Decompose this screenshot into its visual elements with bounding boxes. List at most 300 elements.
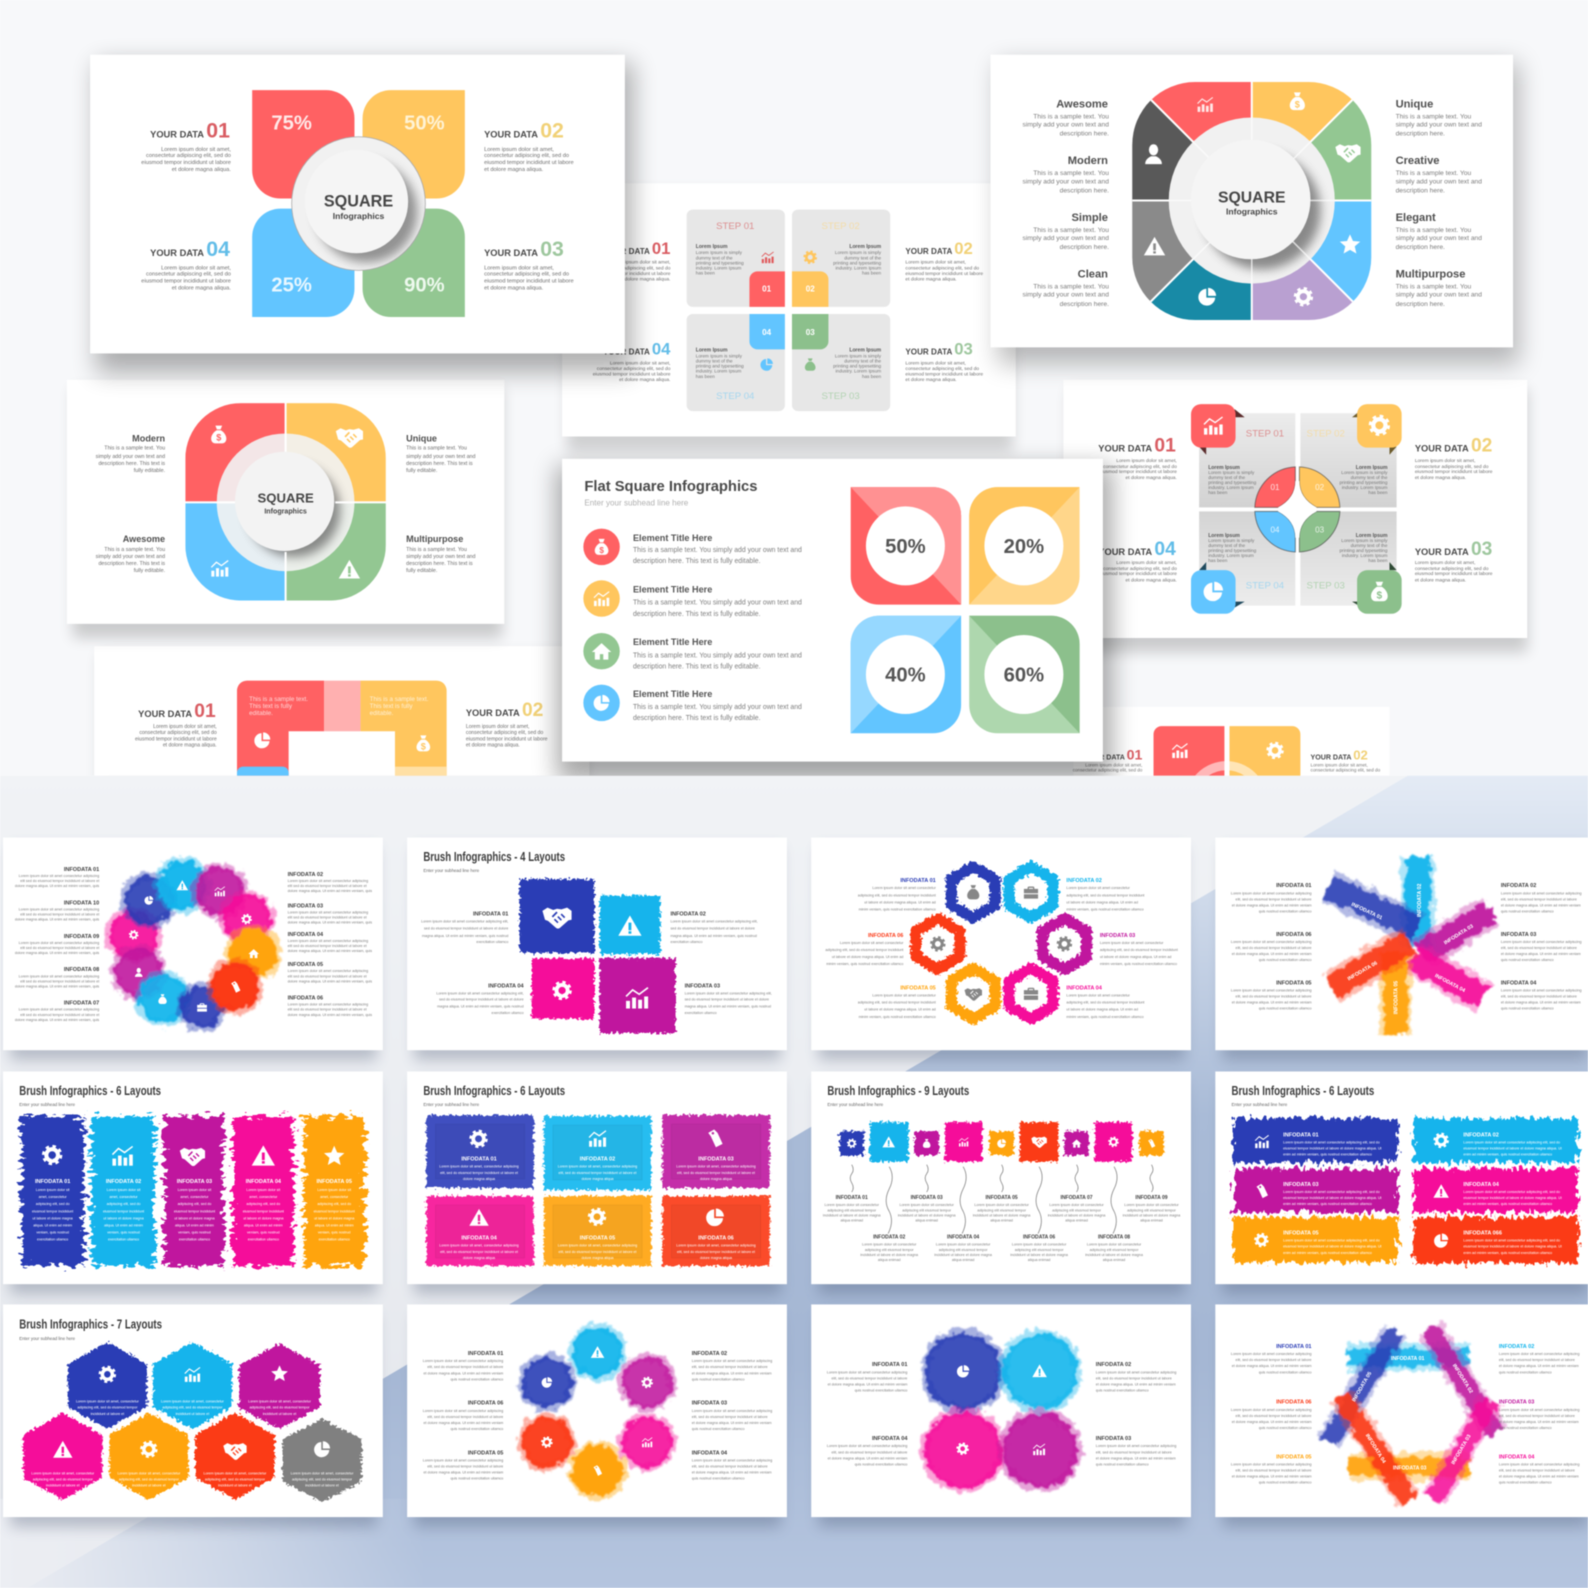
your data 03: YOUR DATA 03 <box>484 237 564 261</box>
column 1 text: aliqua. Ut enim ad minim <box>33 1223 72 1227</box>
stroke labels: INFODATA 05 <box>1351 1371 1373 1403</box>
infodata left labels: elit, sed do eiusmod tempor incididunt ut labore <box>1236 995 1312 999</box>
infodata 03 <box>1096 1436 1176 1466</box>
step numbers: 01 <box>762 285 772 294</box>
your data 02: eiusmod tempor incididunt ut labore <box>484 160 574 166</box>
your data 01: eiusmod tempor incididunt ut labore <box>593 271 671 277</box>
your data 04: Lorem ipsum dolor sit amet, <box>1116 560 1177 566</box>
infodata 01: et dolore magna aliqua. Ut enim ad minim veniam <box>828 1382 907 1386</box>
lower labels: INFODATA 04 <box>947 1235 979 1241</box>
right labels <box>1499 1344 1579 1485</box>
left labels: INFODATA 01 <box>1276 1344 1312 1350</box>
your data 03: consectetur adipiscing elit, sed do <box>905 366 979 372</box>
infodata left labels: Lorem ipsum dolor sit amet consectetur adipiscing <box>1231 940 1312 944</box>
infodata 06: minim veniam, quis nostrud exercitation ullamco <box>826 962 903 966</box>
panel: brush bars slide <box>1215 1071 1588 1294</box>
infodata 03 <box>1100 933 1178 966</box>
lower labels: Lorem ipsum dolor sit consectetur <box>1012 1243 1067 1247</box>
your data 03: eiusmod tempor incididunt ut labore <box>905 372 983 378</box>
infodata 02: et dolore magna aliqua. Ut enim ad minim veniam <box>1096 1382 1176 1386</box>
card texts: elit, sed do eiusmod tempor incididunt ut labore et <box>677 1171 755 1175</box>
infodata 03: minim veniam, quis nostrud exercitation ullamco <box>1100 962 1177 966</box>
left labels: dolore magna aliqua. Ut enim ad minim veniam, quis <box>15 984 99 988</box>
step numbers: 04 <box>762 328 772 337</box>
left labels: et dolore magna aliqua. Ut enim ad minim veniam <box>424 1471 503 1475</box>
step body text: Lorem Ipsum <box>696 347 728 353</box>
your data 04 <box>141 237 231 292</box>
bar texts: enim ad minim veniam, quis nostrud exercitation ullamco <box>1283 1202 1372 1206</box>
infodata right labels: Lorem ipsum dolor sit amet consectetur adipiscing <box>1501 940 1581 944</box>
your data 03: et dolore magna aliqua. <box>905 377 957 383</box>
tile 20%: 20% <box>1004 536 1044 558</box>
upper labels: Lorem ipsum dolor sit consectetur <box>825 1203 880 1207</box>
infodata 04: INFODATA 04 <box>872 1436 908 1442</box>
right labels: Lorem ipsum dolor sit amet consectetur adipiscing <box>1499 1408 1579 1412</box>
your data 01: eiusmod tempor incididunt ut labore <box>135 736 217 742</box>
lower labels <box>860 1235 1144 1262</box>
your data 04: consectetur adipiscing elit, sed do <box>146 271 231 277</box>
left labels: dolore magna aliqua. Ut enim ad minim veniam, quis <box>15 951 99 955</box>
upper labels: INFODATA 05 <box>986 1195 1018 1201</box>
percentages: 25% <box>271 275 312 297</box>
star strokes <box>1329 857 1491 1035</box>
left labels: elit, sed do eiusmod tempor incididunt ut labore <box>427 1365 503 1369</box>
your data labels <box>1073 748 1381 773</box>
infodata 01: quis nostrud exercitation ullamco <box>855 1389 907 1393</box>
modern: This is a sample text. You <box>1033 170 1109 177</box>
card headings: STEP 01 <box>1246 428 1284 439</box>
centre ring <box>217 433 354 571</box>
your data 04 <box>1098 539 1177 583</box>
column 4 text: exercitation ullamco <box>248 1238 279 1242</box>
card body text: Lorem Ipsum is simply <box>1208 538 1255 543</box>
step body text: dummy text of the <box>844 359 882 364</box>
subtitle: Enter your subhead line here <box>423 868 480 873</box>
card texts: Lorem ipsum dolor sit amet, consectetur adipiscing <box>676 1244 756 1248</box>
infodata 05: adipiscing elit, sed do eiusmod tempor incididunt <box>858 1001 936 1005</box>
infodata left labels: Lorem ipsum dolor sit amet consectetur adipiscing <box>1231 891 1312 895</box>
left labels: Lorem ipsum dolor sit amet consectetur adipiscing <box>19 907 99 911</box>
left labels: quis nostrud exercitation ullamco <box>451 1427 503 1431</box>
your data 01: consectetur adipiscing elit, sed do <box>139 730 217 736</box>
card body text: industry. Lorem Ipsum <box>1208 485 1254 490</box>
left labels: INFODATA 01 <box>468 1351 503 1357</box>
card texts <box>439 1157 756 1260</box>
infodata right labels: Lorem ipsum dolor sit amet consectetur adipiscing <box>1501 988 1581 992</box>
blobs <box>925 1333 1078 1489</box>
upper labels: INFODATA 07 <box>1060 1195 1093 1201</box>
upper labels: incididunt ut labore et dolore magna <box>898 1213 956 1217</box>
step body text: Lorem Ipsum <box>849 244 882 250</box>
card body text: has been <box>1368 490 1388 495</box>
your data 04: YOUR DATA 04 <box>603 339 671 358</box>
left labels: Lorem ipsum dolor sit amet consectetur adipiscing <box>423 1409 503 1413</box>
left labels: et dolore magna aliqua. Ut enim ad minim veniam <box>424 1371 503 1375</box>
centre circle <box>292 137 425 270</box>
bar texts: Lorem ipsum dolor sit amet consectetur adipiscing elit, sed do <box>1463 1190 1560 1194</box>
step body text: industry. Lorem Ipsum <box>696 369 741 374</box>
your data labels: YOUR DATA 02 <box>1311 748 1368 763</box>
infodata 04: quis nostrud exercitation ullamco <box>855 1462 907 1466</box>
column 3 text: ut labore et dolore magna <box>174 1216 215 1220</box>
infodata 01: magna aliqua. Ut enim ad minim veniam, quis nostrud <box>422 934 508 938</box>
left labels: Lorem ipsum dolor sit amet consectetur adipiscing <box>19 874 99 878</box>
title: Brush Infographics - 6 Layouts <box>19 1083 161 1098</box>
unique: simply add your own text and <box>1396 122 1482 129</box>
square bracket shape: editable. <box>249 710 273 717</box>
infodata 01: exercitation ullamco <box>476 940 508 944</box>
your data 04: et dolore magna aliqua. <box>1126 577 1177 583</box>
left labels: Lorem ipsum dolor sit amet consectetur adipiscing <box>423 1458 503 1462</box>
your data 02: et dolore magna aliqua. <box>1415 475 1466 481</box>
leaf numbers: 03 <box>1315 526 1325 535</box>
column 4 text: adipiscing elit, sed do <box>246 1202 280 1206</box>
infodata 02 <box>670 912 758 944</box>
modern <box>96 434 165 474</box>
panel: brush hexagons slide <box>3 1304 383 1527</box>
bar texts: Lorem ipsum dolor sit amet consectetur adipiscing elit, sed do <box>1283 1190 1380 1194</box>
your data 02 <box>1415 436 1493 481</box>
your data 01: YOUR DATA 01 <box>150 119 230 143</box>
column 2 text: eiusmod tempor incididunt <box>103 1209 144 1213</box>
right labels <box>692 1351 772 1481</box>
left labels: elit, sed do eiusmod tempor incididunt ut labore <box>1236 1358 1312 1362</box>
right labels: dolore magna aliqua. Ut enim ad minim veniam, quis <box>288 949 372 953</box>
lower labels: incididunt ut labore et dolore magna <box>860 1253 919 1257</box>
right labels: elit, sed do eiusmod tempor incididunt ut labore <box>692 1464 768 1468</box>
hexagon texts: incididunt ut labore et <box>176 1412 209 1416</box>
bar texts: eiusmod tempor incididunt ut labore et dolore magna aliqua. Ut <box>1463 1245 1562 1249</box>
unique: simply add your own text and <box>406 454 476 460</box>
stroke labels: INFODATA 05 <box>1394 981 1400 1014</box>
simple: This is a sample text. You <box>1033 227 1109 234</box>
right labels: INFODATA 04 <box>692 1450 728 1456</box>
element 1: Element Title Here <box>633 533 712 543</box>
your data 03: consectetur adipiscing elit, sed do <box>1415 566 1489 572</box>
infodata 03: adipiscing elit, sed do eiusmod tempor incididunt <box>1100 948 1178 952</box>
brush tiles <box>840 1122 1164 1162</box>
hexagon texts <box>31 1400 354 1488</box>
step headings: STEP 02 <box>821 221 860 232</box>
infodata left labels: INFODATA 01 <box>1276 883 1312 889</box>
hexagon texts: incididunt ut labore et <box>91 1412 124 1416</box>
stroke labels: INFODATA 04 <box>1364 1433 1387 1465</box>
centre ring: SQUARE <box>257 490 314 505</box>
upper labels: aliqua enimad <box>990 1218 1013 1222</box>
infodata 02: Lorem ipsum dolor sit amet consectetur <box>1066 886 1131 890</box>
hexagon texts: Lorem ipsum dolor sit amet, consectetur <box>204 1472 267 1476</box>
modern: simply add your own text and <box>1023 178 1109 185</box>
stroke labels: INFODATA 02 <box>1417 884 1423 917</box>
lower labels: incididunt ut labore et dolore magna <box>934 1253 993 1257</box>
your data 04: et dolore magna aliqua. <box>619 377 670 383</box>
step body text: industry. Lorem Ipsum <box>836 369 881 374</box>
unique: fully editable. <box>406 468 437 474</box>
your data 04: eiusmod tempor incididunt ut labore <box>593 372 671 378</box>
column 3 text: aliqua. Ut enim ad minim <box>175 1223 214 1227</box>
left labels: elit, sed do eiusmod tempor incididunt ut labore <box>1236 1414 1312 1418</box>
step body text: has been <box>862 270 882 275</box>
modern: This is a sample text. You <box>104 446 165 452</box>
infodata left labels: INFODATA 06 <box>1276 932 1312 938</box>
stroke labels: INFODATA 02 <box>1451 1363 1474 1395</box>
infodata 01: sed do eiusmod tempor incididunt ut labore et dolore <box>424 927 508 931</box>
your data 01: consectetur adipiscing elit, sed do <box>1103 464 1177 470</box>
wavy connectors <box>850 1165 1153 1234</box>
left labels: elit sed do eiusmod tempor incididunt ut labore et <box>20 946 99 950</box>
infodata 06 <box>825 933 904 966</box>
right labels: Lorem ipsum dolor sit amet consectetur adipiscing <box>288 879 368 883</box>
card texts: dolore magna aliqua <box>463 1256 495 1260</box>
upper labels: aliqua enimad <box>840 1218 863 1222</box>
multipurpose: fully editable. <box>406 568 437 574</box>
your data 04: YOUR DATA 04 <box>150 237 230 261</box>
infodata 05: minim veniam, quis nostrud exercitation ullamco <box>859 1015 936 1019</box>
column 3 text <box>174 1179 215 1242</box>
lower labels: adipiscing elit eiusmod tempor <box>939 1248 988 1252</box>
right labels: elit sed do eiusmod tempor incididunt ut labore et <box>288 974 367 978</box>
column 2 text: exercitation ullamco <box>108 1238 139 1242</box>
blob icons <box>542 1346 652 1476</box>
stroke labels <box>1347 884 1475 1014</box>
left labels: et dolore magna aliqua. Ut enim ad minim veniam <box>1232 1420 1312 1424</box>
infodata right labels: elit, sed do eiusmod tempor incididunt ut labore <box>1501 946 1577 950</box>
step headings: STEP 01 <box>716 221 754 232</box>
column 5 text: adipiscing elit, sed do <box>317 1202 351 1206</box>
hexagon texts: adipiscing elit, sed do eiusmod tempor <box>77 1406 138 1410</box>
card body text: printing and typesetting <box>1208 548 1257 553</box>
card icons: $ <box>476 1134 481 1143</box>
step body text: industry. Lorem Ipsum <box>836 265 881 270</box>
column 5 text: amet, consectetur <box>320 1195 349 1199</box>
hexagon texts: incididunt ut labore et <box>305 1484 339 1488</box>
centre ring <box>1169 117 1335 284</box>
infodata left labels: et dolore magna aliqua. Ut enim ad minim veniam <box>1232 1001 1312 1005</box>
subtitle: Enter your subhead line here <box>19 1336 76 1341</box>
column 4 text: INFODATA 04 <box>246 1179 282 1185</box>
simple: Simple <box>1071 212 1108 224</box>
infodata 02: INFODATA 02 <box>670 912 706 918</box>
step headings: STEP 04 <box>716 391 755 402</box>
infodata left labels: elit, sed do eiusmod tempor incididunt ut labore <box>1236 946 1312 950</box>
hexagon texts: Lorem ipsum dolor sit amet, consectetur <box>161 1400 225 1404</box>
column 5 text: aliqua. Ut enim ad minim <box>315 1223 354 1227</box>
infodata 01: INFODATA 01 <box>900 878 936 884</box>
your data 02: et dolore magna aliqua. <box>484 167 544 173</box>
column 2 text: ut labore et dolore magna <box>103 1216 144 1220</box>
creative: description here. <box>1396 187 1445 194</box>
your data 02: Lorem ipsum dolor sit amet, <box>1415 458 1475 464</box>
title: Brush Infographics - 6 Layouts <box>423 1083 565 1098</box>
card texts: Lorem ipsum dolor sit amet, consectetur adipiscing <box>439 1244 519 1248</box>
multipurpose <box>406 534 476 574</box>
percentages <box>271 113 445 297</box>
infodata 04 <box>827 1436 908 1466</box>
lower labels: INFODATA 02 <box>873 1235 905 1241</box>
infodata right labels: INFODATA 03 <box>1501 932 1536 938</box>
square bracket shape: This is a sample text. <box>370 696 429 703</box>
column 4 text <box>243 1179 284 1242</box>
hexagon texts: incididunt ut labore et <box>218 1484 252 1488</box>
column 5 text: eiusmod tempor incididunt <box>314 1209 355 1213</box>
infodata 04: INFODATA 04 <box>488 983 524 989</box>
hexagon texts: incididunt ut labore et <box>263 1412 296 1416</box>
centre ring: SQUARE <box>1218 190 1286 207</box>
tile 50%: 50% <box>885 536 926 558</box>
right labels: quis nostrud exercitation ullamco <box>692 1427 745 1431</box>
simple <box>1023 212 1109 251</box>
element 4: description here. This text is fully editable. <box>633 715 761 722</box>
upper labels: aliqua enimad <box>915 1218 938 1222</box>
hexagon texts: incididunt ut labore et <box>46 1484 80 1488</box>
element 2 <box>583 580 802 618</box>
panel: four quadrant round slide <box>67 380 504 638</box>
your data 01: YOUR DATA 01 <box>603 239 670 258</box>
infodata 03: et dolore magna aliqua. Ut enim ad minim veniam <box>1096 1456 1176 1460</box>
leaf numbers: 01 <box>1271 483 1280 492</box>
column 2 text: aliqua. Ut enim ad minim <box>104 1223 143 1227</box>
column 1 text: adipiscing elit, sed do <box>36 1202 70 1206</box>
card texts: dolore magna aliqua <box>582 1256 614 1260</box>
awesome: Awesome <box>1056 98 1108 110</box>
left labels: INFODATA 05 <box>468 1450 503 1456</box>
element 2: Element Title Here <box>633 584 712 594</box>
left labels: et dolore magna aliqua. Ut enim ad minim veniam <box>1232 1364 1312 1368</box>
lower labels: Lorem ipsum dolor sit consectetur <box>862 1243 917 1247</box>
step numbers: 02 <box>806 285 815 294</box>
infodata left labels: Lorem ipsum dolor sit amet consectetur adipiscing <box>1231 988 1312 992</box>
card body text: printing and typesetting <box>1208 480 1257 485</box>
column icons <box>43 1145 344 1166</box>
upper labels: Lorem ipsum dolor sit consectetur <box>1124 1203 1179 1207</box>
infodata right labels: et dolore magna aliqua. Ut enim ad minim veniam <box>1501 952 1581 956</box>
left labels: elit, sed do eiusmod tempor incididunt ut labore <box>427 1415 503 1419</box>
right labels: elit, sed do eiusmod tempor incididunt ut labore <box>692 1365 768 1369</box>
your data 03 <box>484 237 574 292</box>
infodata right labels: et dolore magna aliqua. Ut enim ad minim veniam <box>1501 1001 1581 1005</box>
awesome: fully editable. <box>134 568 165 574</box>
bar texts: eiusmod tempor incididunt ut labore et dolore magna aliqua. Ut <box>1283 1196 1382 1200</box>
bar texts: Lorem ipsum dolor sit amet consectetur adipiscing elit, sed do <box>1283 1140 1380 1144</box>
step body text: Lorem Ipsum <box>849 347 882 353</box>
multipurpose: simply add your own text and <box>1396 292 1482 299</box>
right labels: dolore magna aliqua. Ut enim ad minim veniam, quis <box>288 921 372 925</box>
step body text: printing and typesetting <box>833 364 882 369</box>
upper labels: adipiscing elit eiusmod tempor <box>1127 1208 1177 1212</box>
column 3 text: INFODATA 03 <box>177 1179 212 1185</box>
stroke labels: INFODATA 03 <box>1443 923 1475 946</box>
your data 01 <box>135 701 217 748</box>
infodata 06: adipiscing elit, sed do eiusmod tempor incididunt <box>825 948 903 952</box>
lower labels: aliqua enimad <box>1028 1258 1050 1262</box>
column 4 text: Lorem ipsum dolor sit <box>246 1188 280 1192</box>
your data 04: consectetur adipiscing elit, sed do <box>597 366 671 372</box>
left labels: quis nostrud exercitation ullamco <box>1259 1481 1312 1485</box>
ribbon folds <box>1199 409 1397 608</box>
your data 03: YOUR DATA 03 <box>905 339 973 358</box>
step body text <box>696 244 882 379</box>
column 1 text: veniam, quis nostrud <box>36 1231 69 1235</box>
step cards <box>687 210 890 411</box>
upper labels: aliqua enimad <box>1140 1218 1163 1222</box>
right labels: elit, sed do eiusmod tempor incididunt ut labore <box>1499 1414 1575 1418</box>
multipurpose: description here. <box>1396 301 1445 308</box>
panel: step ribbon slide <box>1063 380 1527 652</box>
infodata 02: Lorem ipsum dolor sit amet consectetur adipiscing elit, <box>670 920 758 924</box>
lower labels: incididunt ut labore et dolore magna <box>1085 1253 1144 1257</box>
centre circle: Infographics <box>333 211 385 221</box>
multipurpose: description here. This text is <box>406 561 473 567</box>
bar texts: INFODATA 066 <box>1463 1231 1502 1237</box>
step headings: STEP 03 <box>821 391 860 402</box>
awesome: This is a sample text. You <box>1033 113 1109 120</box>
element 2: description here. This text is fully editable. <box>633 611 761 618</box>
left labels: INFODATA 05 <box>1276 1454 1312 1460</box>
infodata right labels: et dolore magna aliqua. Ut enim ad minim veniam <box>1501 903 1581 907</box>
card body text: Lorem Ipsum is simply <box>1341 470 1388 475</box>
element 3: description here. This text is fully editable. <box>633 663 761 670</box>
infodata right labels: elit, sed do eiusmod tempor incididunt ut labore <box>1501 897 1577 901</box>
element 3 <box>583 633 802 670</box>
element 3: Element Title Here <box>633 637 712 647</box>
right labels: Lorem ipsum dolor sit amet consectetur adipiscing <box>692 1409 772 1413</box>
column 3 text: exercitation ullamco <box>179 1238 210 1242</box>
modern: fully editable. <box>134 468 165 474</box>
step body text: dummy text of the <box>696 255 733 260</box>
infodata 03: INFODATA 03 <box>685 983 720 989</box>
right labels: quis nostrud exercitation ullamco <box>1499 1370 1552 1374</box>
upper labels: adipiscing elit eiusmod tempor <box>827 1208 877 1212</box>
your data 01: YOUR DATA 01 <box>1098 436 1176 457</box>
card body text: has been <box>1368 558 1388 563</box>
left labels: et dolore magna aliqua. Ut enim ad minim veniam <box>424 1421 503 1425</box>
square bracket shape: This is a sample text. <box>249 696 308 703</box>
hexagon texts: adipiscing elit, sed do eiusmod tempor <box>249 1406 310 1410</box>
left labels: INFODATA 10 <box>64 900 99 906</box>
creative: simply add your own text and <box>1396 178 1482 185</box>
column 1 text <box>32 1179 73 1242</box>
your data 01: eiusmod tempor incididunt ut labore <box>141 160 231 166</box>
right labels: INFODATA 02 <box>1499 1344 1534 1350</box>
column 1 text: ut labore et dolore magna <box>33 1216 73 1220</box>
upper labels: incididunt ut labore et dolore magna <box>1123 1213 1181 1217</box>
bar texts: eiusmod tempor incididunt ut labore et dolore magna aliqua. Ut <box>1283 1146 1382 1150</box>
bar texts: INFODATA 03 <box>1283 1182 1319 1188</box>
infodata 02: sed do eiusmod tempor incididunt ut labore et dolore <box>670 927 755 931</box>
upper labels: adipiscing elit eiusmod tempor <box>977 1208 1027 1212</box>
upper labels: adipiscing elit eiusmod tempor <box>902 1208 952 1212</box>
title: Flat Square Infographics <box>584 479 757 495</box>
upper labels: INFODATA 01 <box>836 1195 868 1201</box>
card texts: INFODATA 03 <box>698 1157 734 1163</box>
your data 02: consectetur adipiscing elit, sed do <box>484 153 569 159</box>
left labels: INFODATA 01 <box>64 867 99 873</box>
modern: Modern <box>132 434 165 444</box>
column 4 text: veniam, quis nostrud <box>247 1231 280 1235</box>
stroke labels: INFODATA 04 <box>1434 973 1466 994</box>
your data 03: Lorem ipsum dolor sit amet, <box>1415 560 1475 566</box>
quadrants <box>185 403 386 601</box>
card texts: Lorem ipsum dolor sit amet, consectetur adipiscing <box>558 1165 637 1169</box>
subtitle: Enter your subhead line here <box>1232 1102 1288 1107</box>
left labels <box>1231 1344 1312 1485</box>
square icons: $ <box>560 986 565 996</box>
column 3 text: eiusmod tempor incididunt <box>174 1209 215 1213</box>
infodata 06: INFODATA 06 <box>868 933 903 939</box>
hexagon icons <box>931 885 1071 1001</box>
elegant: Elegant <box>1396 212 1436 224</box>
card headings: STEP 02 <box>1307 428 1345 439</box>
